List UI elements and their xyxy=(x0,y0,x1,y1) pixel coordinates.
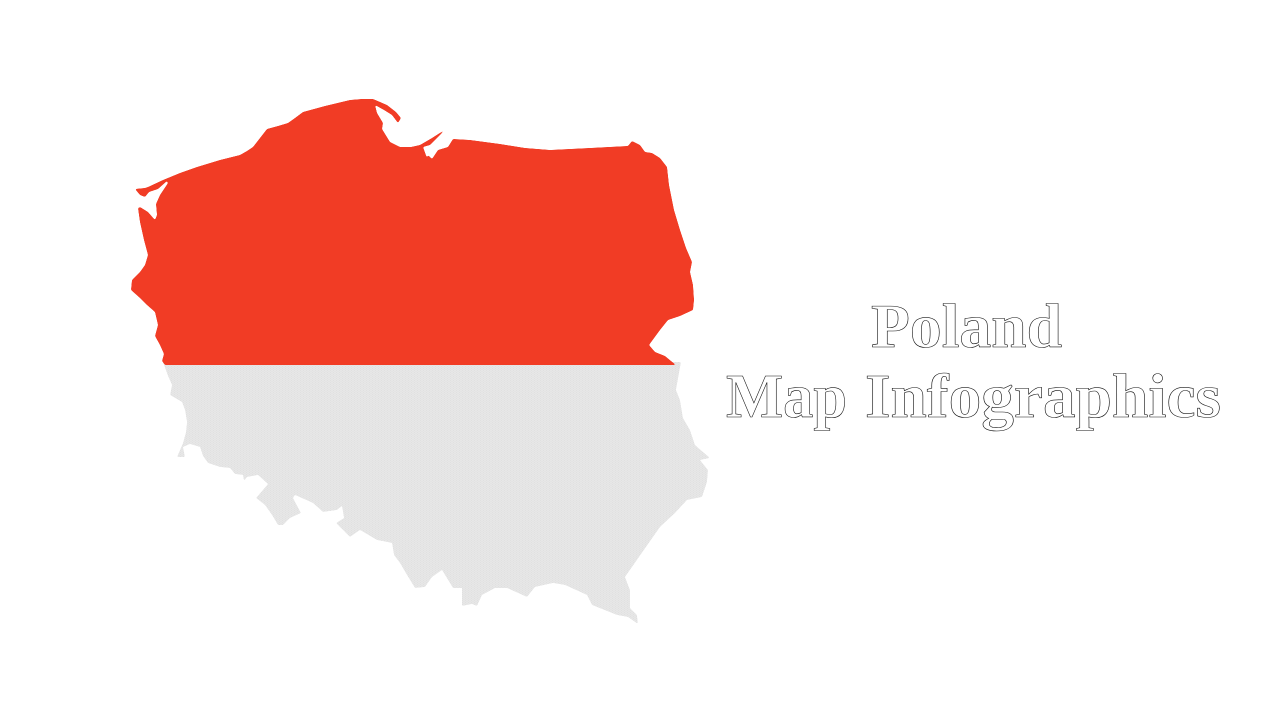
map of Poland xyxy=(131,99,710,624)
title line 2 xyxy=(726,363,1221,431)
title line 2: Infographics xyxy=(865,363,1221,431)
title line 1: Poland xyxy=(871,293,1062,361)
title xyxy=(726,293,1221,431)
title line 2: Map xyxy=(726,363,847,431)
map lower half: grey xyxy=(163,362,710,624)
map upper half: red xyxy=(131,99,694,365)
